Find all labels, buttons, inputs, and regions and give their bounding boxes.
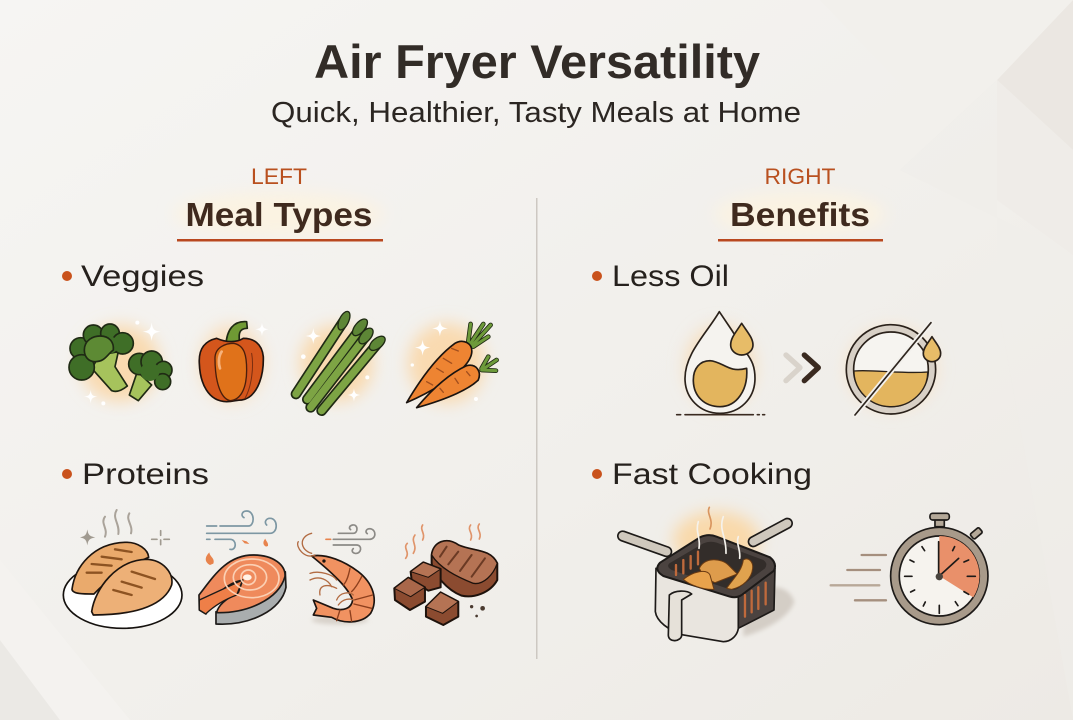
Fast Cooking label: Fast Cooking	[612, 458, 812, 491]
Veggies label: Veggies	[81, 260, 204, 293]
icon: air fryer basket	[623, 507, 794, 642]
icon: oil drop	[677, 312, 765, 415]
icon: carrots	[407, 320, 497, 408]
right column heading: Benefits	[730, 196, 870, 233]
title: Air Fryer Versatility	[314, 35, 760, 88]
icon: crossed oil circle	[846, 323, 941, 415]
less oil icons	[677, 312, 941, 415]
icon: asparagus	[296, 310, 388, 411]
protein icons	[63, 510, 497, 628]
icon: bell pepper	[199, 322, 269, 402]
veggie icons	[69, 310, 497, 411]
icon: broccoli	[69, 321, 172, 405]
left column heading: LEFT	[251, 164, 307, 189]
right column heading: RIGHT	[764, 164, 836, 189]
icon: steak and cubes	[394, 524, 497, 625]
icon: grilled chicken on plate	[63, 510, 182, 628]
Proteins label: Proteins	[82, 458, 209, 491]
icon: stopwatch	[891, 513, 988, 625]
motion lines	[831, 555, 886, 600]
Less Oil label: Less Oil	[612, 260, 729, 293]
icon: shrimp	[298, 525, 375, 625]
left column heading	[174, 164, 384, 242]
arrow: chevrons	[786, 355, 818, 381]
left column heading: Meal Types	[186, 196, 372, 233]
fast cooking icons	[623, 507, 988, 642]
subtitle: Quick, Healthier, Tasty Meals at Home	[271, 97, 801, 129]
right column heading	[715, 164, 885, 242]
icon: salmon steak	[199, 511, 286, 624]
